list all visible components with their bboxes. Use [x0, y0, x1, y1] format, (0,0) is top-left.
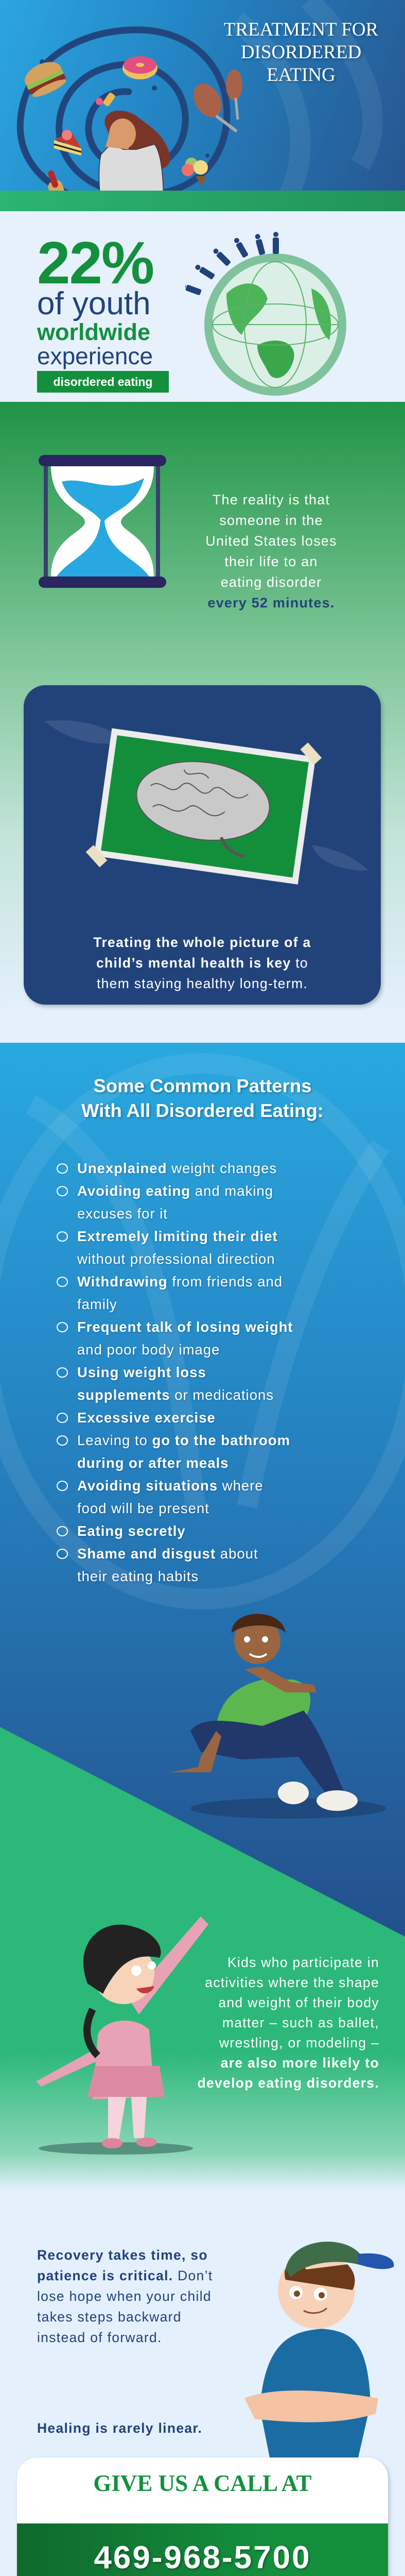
patterns list: Shame and disgust about [77, 1546, 258, 1562]
burger [21, 57, 68, 100]
blue patterns section [0, 1043, 405, 1939]
hourglass stat text: eating disorder [221, 574, 322, 590]
recovery text [37, 2247, 213, 2345]
kids text: Kids who participate in [227, 1955, 379, 1970]
globe with people [185, 232, 346, 396]
photo of brain [44, 720, 368, 885]
woman [104, 111, 170, 170]
spiral and woman illustration [16, 0, 383, 191]
hourglass stat text: their life to an [224, 554, 318, 569]
chicken legs [188, 79, 227, 122]
stat section [0, 211, 405, 402]
patterns list: Unexplained weight changes [77, 1160, 277, 1176]
recovery text: patience is critical. Don’t [37, 2268, 213, 2283]
call to action card [17, 2458, 388, 2576]
stat text block: disordered eating [54, 375, 152, 388]
healing text: Healing is rarely linear. [37, 2420, 202, 2436]
stat text block: of youth [37, 286, 151, 321]
stat text block: 22% [37, 229, 153, 296]
call heading: GIVE US A CALL AT [93, 2470, 312, 2496]
patterns heading: Some Common Patterns [94, 1075, 311, 1096]
stat text block: worldwide [37, 319, 150, 345]
recovery text: lose hope when your child [37, 2289, 212, 2304]
hot dog [47, 179, 73, 217]
kids text: matter – such as ballet, [222, 2015, 379, 2030]
patterns list: excuses for it [77, 1206, 168, 1222]
recovery text: takes steps backward [37, 2309, 182, 2325]
kids text: are also more likely to [221, 2055, 379, 2071]
green gradient section [0, 402, 405, 1043]
phone number bar: 469-968-5700 [94, 2540, 311, 2575]
panel caption: Treating the whole picture of a [93, 935, 311, 950]
stat text block: experience [37, 343, 153, 369]
kids text [197, 1955, 379, 2091]
green diagonal section [0, 1727, 405, 2191]
panel caption: child’s mental health is key to [96, 955, 308, 971]
hourglass icon [39, 455, 166, 588]
header section [0, 0, 405, 211]
kids text: activities where the shape [205, 1975, 379, 1990]
title: TREATMENT FOR [224, 19, 378, 40]
hourglass stat text: every 52 minutes. [207, 595, 335, 611]
title [224, 19, 379, 86]
patterns list: without professional direction [77, 1251, 275, 1267]
phone number bar [17, 2523, 388, 2576]
ice cream [196, 176, 206, 187]
illustration: boy with cap [244, 2242, 394, 2458]
patterns list: family [77, 1296, 117, 1312]
patterns list: supplements or medications [77, 1387, 274, 1403]
patterns list: Frequent talk of losing weight [77, 1319, 293, 1335]
kids text: develop eating disorders. [197, 2075, 379, 2091]
patterns list: Eating secretly [77, 1523, 186, 1539]
illustration: ballet girl [36, 1917, 208, 2155]
patterns list: and poor body image [77, 1342, 220, 1358]
cake [54, 140, 81, 156]
patterns heading [81, 1075, 324, 1123]
title: DISORDERED [241, 42, 361, 63]
patterns list: Using weight loss [77, 1364, 206, 1380]
kids text: wrestling, or modeling – [219, 2035, 379, 2050]
patterns list: Withdrawing from friends and [77, 1274, 283, 1290]
patterns list: Avoiding eating and making [77, 1183, 273, 1199]
recovery text: instead of forward. [37, 2330, 162, 2345]
stat text block [37, 229, 169, 393]
patterns list: their eating habits [77, 1568, 199, 1584]
hourglass stat text [205, 492, 337, 611]
candy [96, 98, 103, 105]
donut [122, 57, 157, 79]
patterns heading: With All Disordered Eating: [81, 1100, 324, 1121]
hourglass stat text: United States loses [205, 533, 337, 549]
patterns list: during or after meals [77, 1455, 229, 1471]
hourglass stat text: someone in the [219, 513, 323, 528]
patterns list: food will be present [77, 1500, 209, 1516]
patterns list: Avoiding situations where [77, 1478, 263, 1494]
patterns list: Extremely limiting their diet [77, 1228, 278, 1244]
panel caption: them staying healthy long-term. [97, 976, 308, 991]
illustration: sitting boy [170, 1614, 386, 1819]
panel caption [93, 935, 311, 991]
title: EATING [267, 64, 336, 86]
kids text: and weight of their body [218, 1995, 379, 2010]
hourglass stat text: The reality is that [213, 492, 330, 507]
patterns list: Excessive exercise [77, 1410, 216, 1426]
recovery text: Recovery takes time, so [37, 2247, 208, 2263]
panel: brain [24, 685, 381, 1005]
patterns list: Leaving to go to the bathroom [77, 1432, 290, 1448]
patterns list [57, 1160, 293, 1585]
